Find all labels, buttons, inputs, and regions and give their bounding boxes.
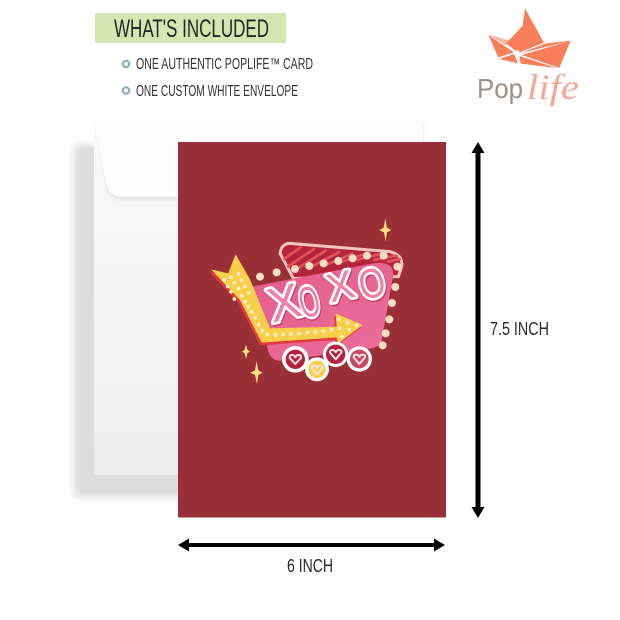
xoxo lettering: O: [295, 277, 326, 329]
xoxo lettering: O: [294, 276, 325, 328]
arrow: [209, 254, 363, 346]
marquee bulbs: [256, 252, 401, 349]
list item: card: [123, 56, 313, 73]
label: 6 inch: 6 INCH: [287, 556, 333, 576]
sparkles: [242, 218, 391, 384]
label: 7.5 inch: 7.5 INCH: [490, 319, 549, 339]
heading: what's included: [95, 13, 286, 43]
sign pink panel: [252, 263, 393, 361]
xoxo lettering: O: [354, 258, 390, 309]
xoxo lettering: X: [262, 273, 306, 333]
greeting card: [178, 142, 446, 518]
logo wordmark: Pop: [477, 73, 523, 104]
arrow: width dimension: [178, 538, 445, 552]
envelope flap: [94, 122, 423, 200]
xoxo lettering: O: [355, 259, 391, 310]
list item: envelope: ONE CUSTOM WHITE ENVELOPE: [136, 83, 298, 100]
xoxo lettering: X: [263, 275, 307, 335]
included items list: [123, 56, 313, 100]
logo: poplife: [477, 8, 579, 107]
xoxo lettering: [262, 258, 391, 335]
list item: card: ONE AUTHENTIC POPLIFE™ CARD: [136, 56, 313, 73]
card illustration: xoxo marquee sign: [209, 218, 403, 384]
logo wordmark: [477, 67, 579, 107]
sign top panel: [280, 243, 403, 278]
logo wordmark: life: [527, 67, 579, 107]
heading: what's included: WHAT'S INCLUDED: [114, 15, 269, 43]
xoxo lettering: X: [322, 262, 359, 312]
arrow: height dimension: [472, 142, 484, 518]
heart badges: [282, 342, 372, 381]
icon: origami boat: [488, 8, 571, 68]
xoxo lettering: X: [323, 264, 360, 313]
list item: envelope: [123, 83, 298, 100]
envelope with shadow: [74, 122, 423, 497]
